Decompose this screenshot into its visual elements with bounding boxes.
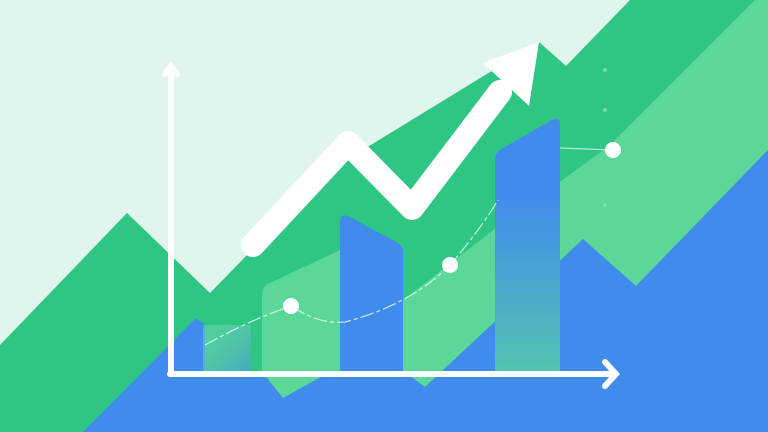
blue foreground	[83, 150, 768, 432]
bar 2	[340, 215, 403, 372]
x axis	[170, 362, 616, 386]
big white arrow	[253, 42, 539, 245]
data points	[283, 142, 621, 314]
light green band	[403, 0, 768, 387]
bar 3	[495, 119, 560, 372]
curve segment	[560, 148, 613, 150]
y axis	[165, 66, 177, 374]
light green hexagon	[262, 250, 340, 398]
trend curve	[205, 200, 498, 345]
translucent square	[203, 325, 251, 371]
faint dots	[603, 68, 607, 207]
